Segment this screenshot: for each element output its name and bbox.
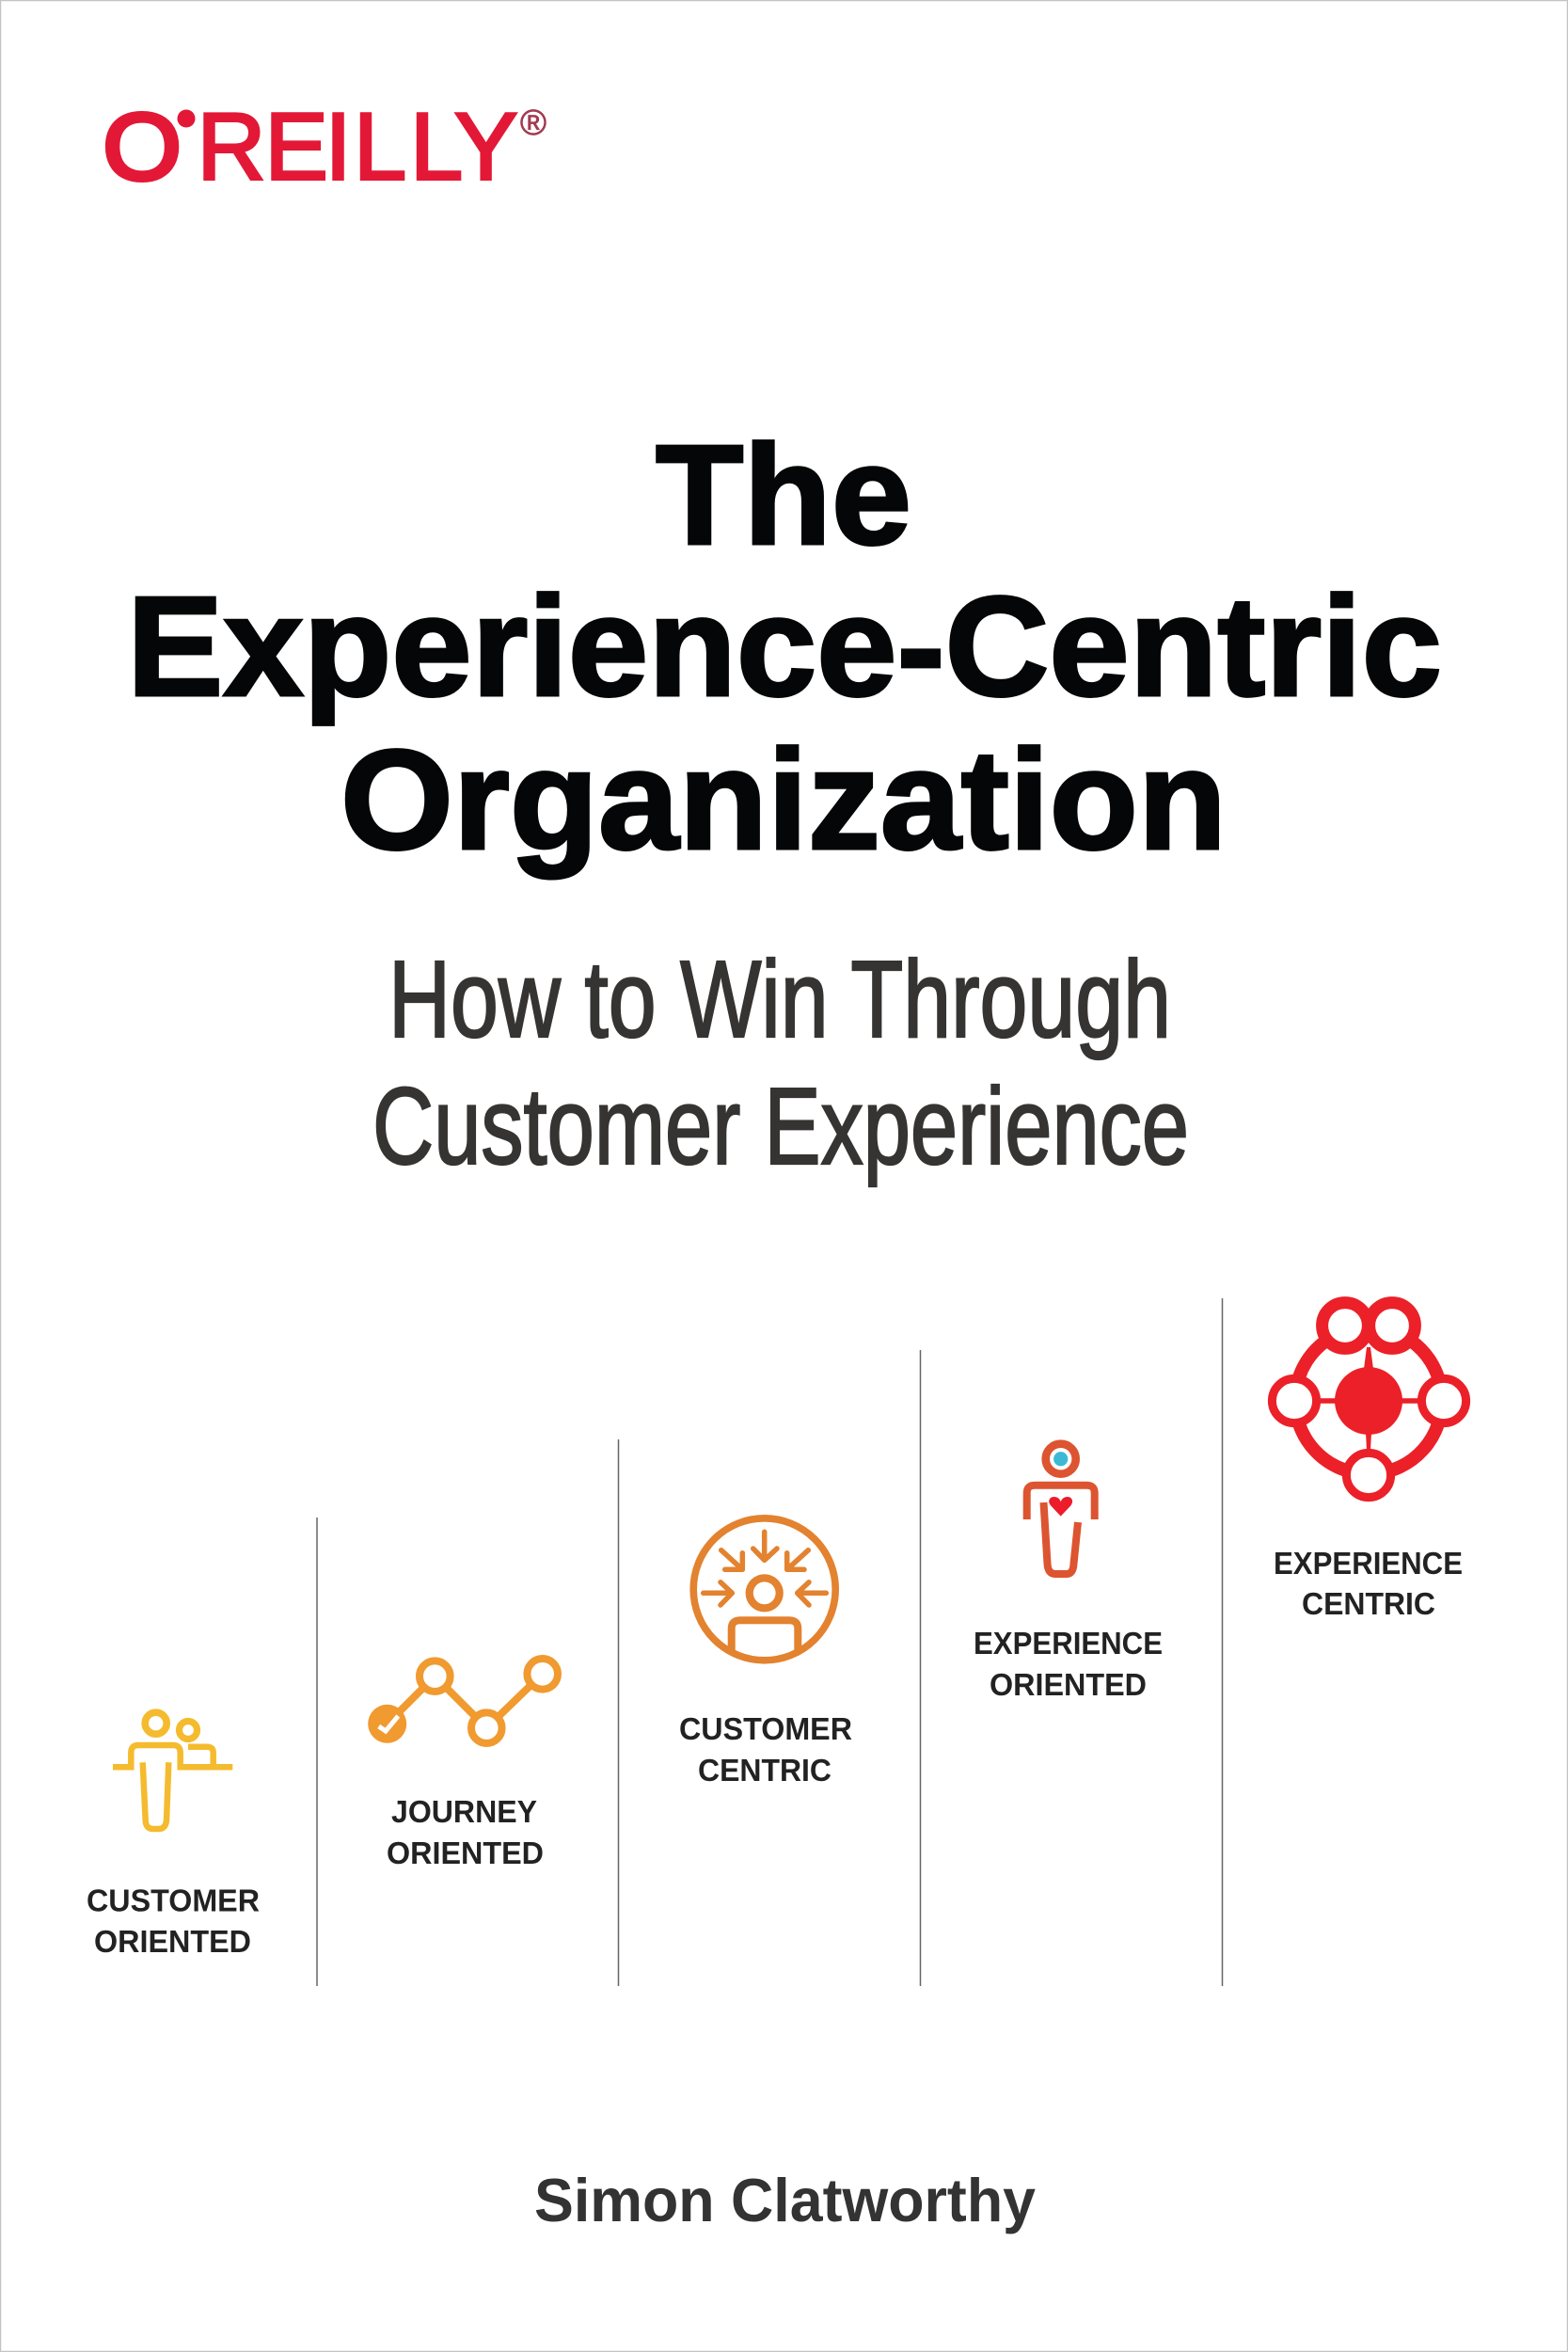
stage: journey oriented (368, 1659, 558, 1871)
subtitle (372, 938, 1189, 1187)
icon: customer surrounded by arrows (693, 1518, 835, 1661)
icon: person with heart (1027, 1444, 1095, 1574)
label: experience centric: CENTRIC (1302, 1587, 1435, 1622)
stage: experience centric (1272, 1303, 1466, 1622)
label: customer oriented: ORIENTED (94, 1925, 251, 1960)
label: customer oriented (87, 1883, 260, 1960)
label: experience centric (1274, 1547, 1463, 1622)
label: experience oriented: EXPERIENCE (974, 1627, 1163, 1661)
label: customer centric: CUSTOMER (679, 1712, 852, 1747)
publisher logo: O' (103, 94, 200, 199)
label: customer centric (679, 1712, 852, 1788)
icon: customer and agent at counter (113, 1712, 232, 1829)
subtitle: How to Win Through (388, 938, 1171, 1060)
label: experience centric: EXPERIENCE (1274, 1547, 1463, 1581)
title (127, 415, 1442, 879)
label: customer centric: CENTRIC (698, 1754, 832, 1788)
label: experience oriented (974, 1627, 1163, 1703)
stage: customer centric (679, 1518, 852, 1788)
title: The (656, 415, 911, 574)
icon: journey path (368, 1659, 558, 1743)
label: journey oriented: ORIENTED (387, 1836, 544, 1871)
label: experience oriented: ORIENTED (990, 1668, 1147, 1703)
label: journey oriented (387, 1795, 544, 1871)
title: Experience-Centric (127, 566, 1442, 725)
stage: customer oriented (87, 1712, 260, 1960)
stage: experience oriented (974, 1444, 1163, 1703)
publisher logo: REILLY (198, 94, 517, 199)
subtitle: Customer Experience (372, 1065, 1189, 1187)
author: Simon Clatworthy (534, 2166, 1036, 2234)
publisher logo: ® (520, 103, 546, 143)
label: journey oriented: JOURNEY (391, 1795, 537, 1830)
title: Organization (341, 720, 1227, 879)
label: customer oriented: CUSTOMER (87, 1883, 260, 1919)
icon: connected experience network (1272, 1303, 1466, 1498)
